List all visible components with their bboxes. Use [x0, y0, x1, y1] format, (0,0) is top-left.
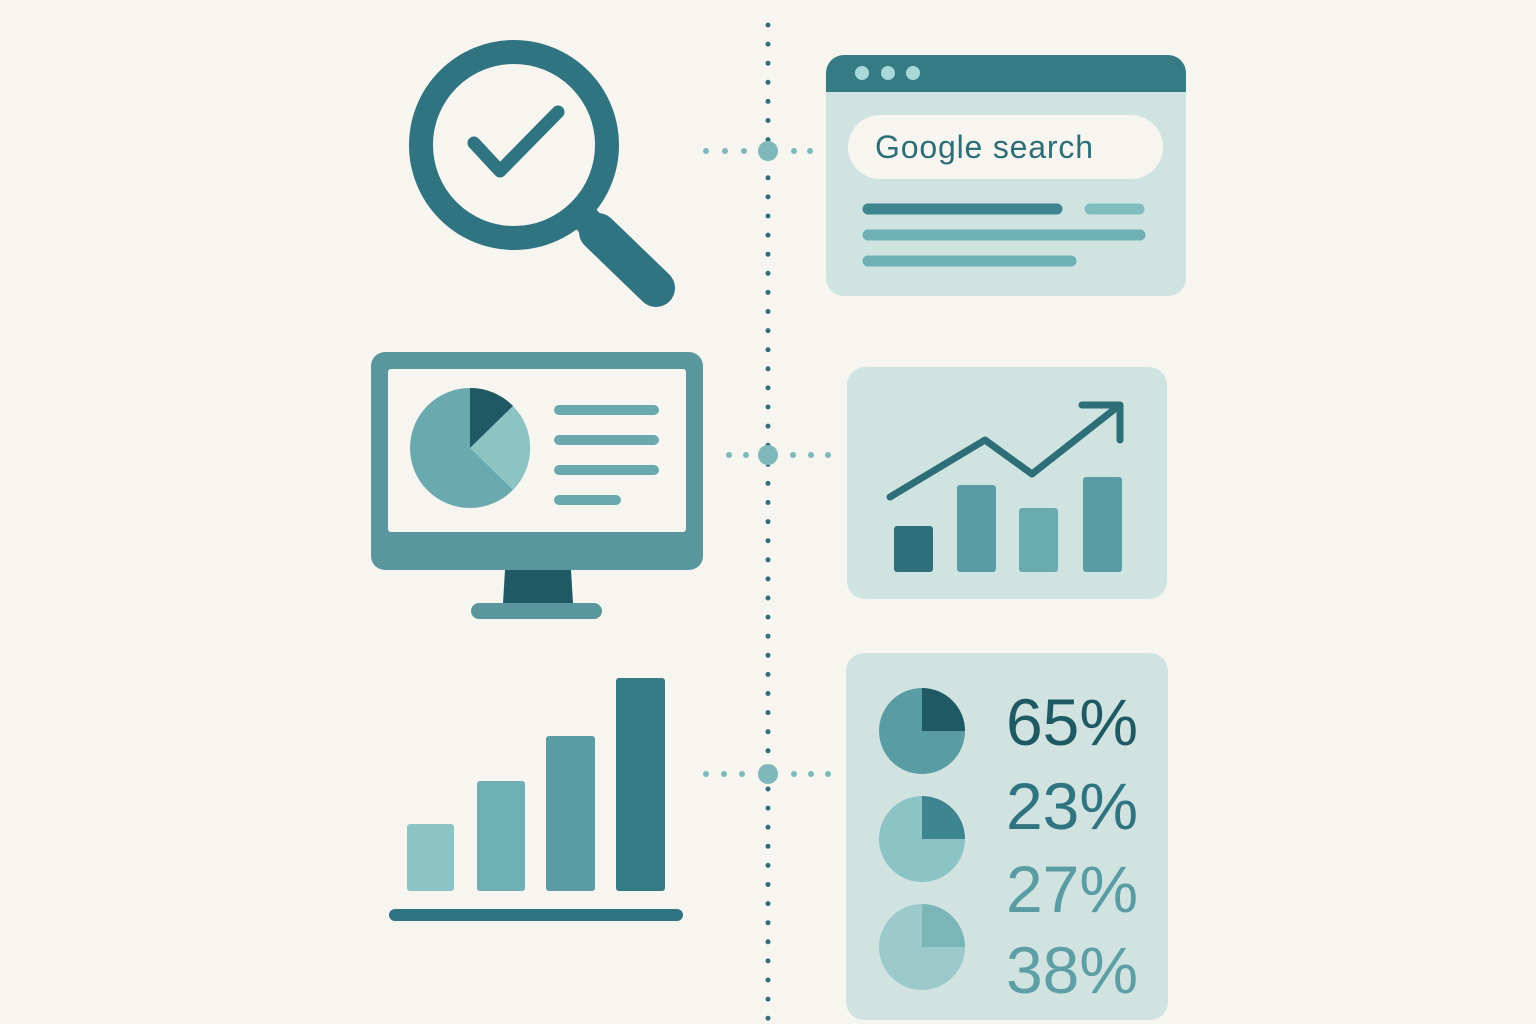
panel: browser search — [826, 55, 1186, 296]
pie 1 — [879, 688, 965, 774]
icon: monitor with pie chart — [371, 352, 703, 619]
stat numbers: 23% — [1006, 769, 1138, 843]
panel: percentages — [846, 653, 1168, 1020]
icon: magnifier with check — [421, 52, 656, 288]
panel: growth chart — [847, 367, 1167, 599]
icon: bar chart — [389, 678, 683, 921]
stat numbers: 65% — [1006, 685, 1138, 759]
stat numbers — [1006, 685, 1138, 1007]
stat numbers: 27% — [1006, 852, 1138, 926]
connector: row 2 — [726, 445, 831, 465]
search text: Google search — [875, 129, 1093, 165]
connector: row 1 — [703, 141, 813, 161]
pie 3 — [879, 904, 965, 990]
stat numbers: 38% — [1006, 933, 1138, 1007]
pie 2 — [879, 796, 965, 882]
connector: row 3 — [703, 764, 831, 784]
